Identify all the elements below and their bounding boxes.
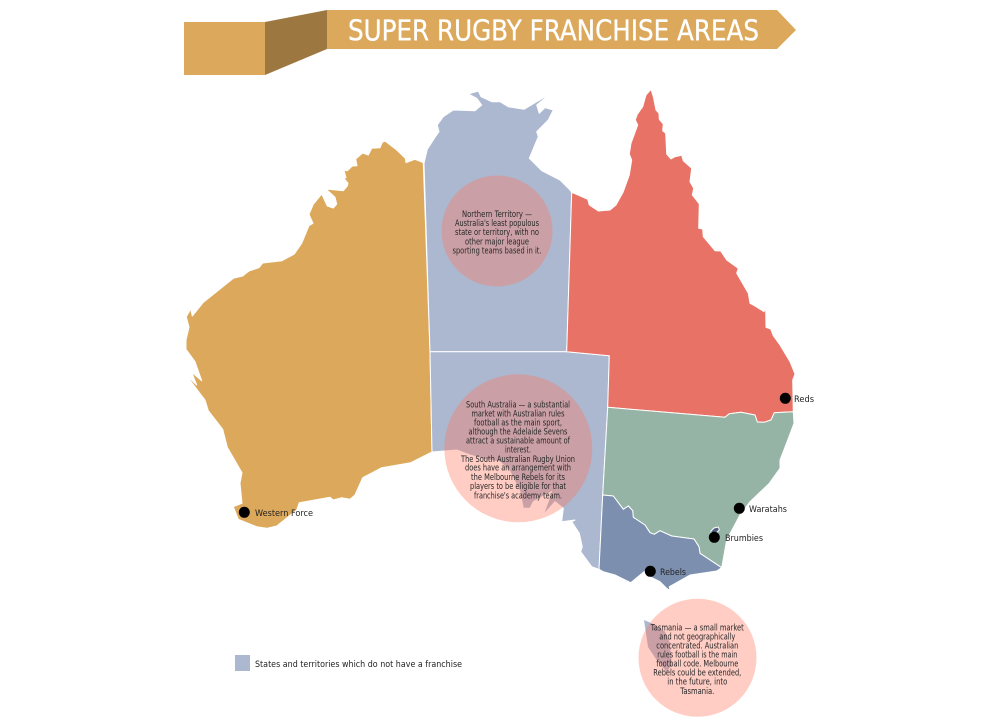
callout text: Tasmania — a small market [650,623,744,633]
marker: Reds: Reds [794,395,814,405]
callout circle [638,599,756,717]
Victoria [599,495,722,591]
legend [235,655,462,671]
South Australia [430,352,609,569]
callout: Northern Territory [442,176,552,286]
callout text: interest. [505,446,531,456]
marker: Reds [780,393,814,405]
map of Australia [186,89,795,672]
New South Wales [603,407,794,568]
title: SUPER RUGBY FRANCHISE AREAS [348,14,759,48]
callout text: sporting teams based in it. [452,246,542,256]
callout text: and not geographically [659,632,735,642]
banner fold [265,10,327,75]
callout text: in the future, into [667,678,727,688]
callout text: Tasmania. [680,687,714,697]
callout text: Northern Territory — [462,210,532,220]
callout text: South Australia — a substantial [466,400,570,410]
callout text: does have an arrangement with [465,464,571,474]
marker: Waratahs [734,503,787,515]
callout text: other major league [465,238,529,248]
callout text [452,210,542,256]
Northern Territory [424,91,572,352]
marker: Western Force [239,507,313,519]
callout text: players to be eligible for that [470,482,567,492]
callout circle [444,374,592,522]
marker: Brumbies [709,532,763,544]
callout text: attract a sustainable amount of [466,437,571,447]
callout circle [442,176,552,286]
banner front block [184,22,265,75]
callout text: the Melbourne Rebels for its [471,473,565,483]
Tasmania [644,620,672,672]
marker: Waratahs: Waratahs [749,505,787,515]
callout text: although the Adelaide Sevens [468,428,568,438]
callout text: market with Australian rules [472,409,565,419]
marker: Western Force: Western Force [255,509,313,519]
callout: Tasmania [638,599,756,717]
callout: South Australia [444,374,592,522]
callout text [650,623,744,697]
legend swatch [235,655,250,671]
callout text: football as the main sport, [474,418,562,428]
marker: Rebels [645,566,686,578]
banner arrow [327,10,796,49]
Western Australia [186,141,432,528]
callout text: state or territory, with no [455,228,539,238]
callout text: football code. Melbourne [656,659,738,669]
legend text: States and territories which do not have a franchise [255,660,462,670]
callout text: concentrated. Australian [656,641,738,651]
Australian Capital Territory [711,527,719,540]
callout text: franchise's academy team. [474,491,562,501]
callout text: Australia's least populous [455,219,539,229]
callout text: Rebels could be extended, [653,668,741,678]
title banner [184,10,796,75]
callout text [460,400,575,501]
callout text: rules football is the main [657,650,737,660]
Queensland [567,89,795,422]
marker: Brumbies: Brumbies [725,534,763,544]
callout text: The South Australian Rugby Union [460,455,575,465]
marker: Rebels: Rebels [660,568,686,578]
